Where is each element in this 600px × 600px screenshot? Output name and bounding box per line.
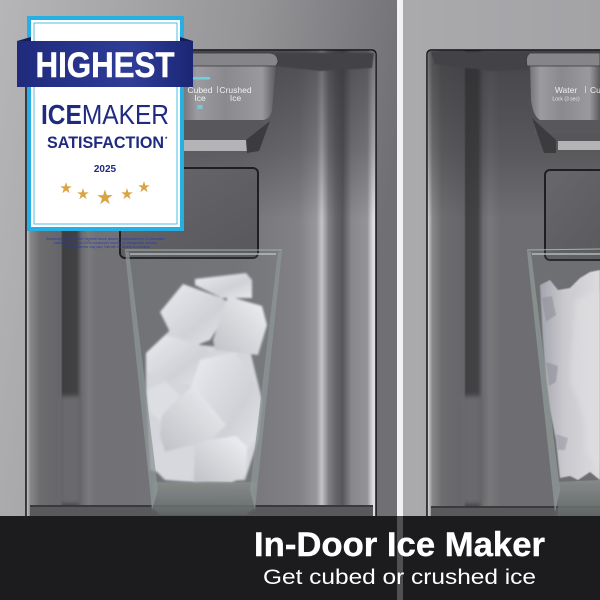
dispenser label: cubed ice: Cubed [187, 85, 213, 95]
dispenser head: Ice [194, 93, 206, 103]
footnote under badge: Samsung received the highest score among manufacturers in icemaker [46, 237, 166, 241]
white divider between doors [397, 0, 403, 600]
divider seen through band [397, 516, 403, 600]
glass of crushed ice [527, 249, 600, 516]
five gold stars: ★ [96, 187, 114, 209]
footnote under badge: satisfaction in the 2025 consumer survey of refrigerator owners. [54, 241, 158, 245]
panel: right dispenser recess [427, 50, 600, 520]
dispenser head [183, 53, 278, 155]
ice cubes [146, 273, 267, 483]
right door steel background [403, 0, 600, 600]
dispenser label: water: Water [555, 85, 577, 95]
glass base [153, 482, 256, 515]
footnote under badge: Your experiences may vary. Visit site for details and awards. [63, 245, 150, 249]
five gold stars [59, 179, 151, 209]
five gold stars: ★ [76, 186, 90, 203]
dispenser head: Ice [230, 93, 241, 103]
ribbon: highest: HIGHEST [36, 46, 174, 85]
five gold stars: ★ [59, 180, 73, 197]
bottom caption band [0, 516, 600, 600]
dark control panel [120, 168, 258, 258]
heading: icemaker: ICEMAKER [41, 99, 169, 130]
panel: left dispenser recess [26, 50, 376, 520]
footnote under badge [46, 237, 166, 249]
glass of cubed ice [125, 250, 282, 515]
top shadow of recess [276, 53, 374, 71]
glass walls [125, 251, 158, 510]
badge: icemaker satisfaction award: * [165, 137, 168, 143]
five gold stars: ★ [137, 179, 151, 196]
dispenser label: crushed ice: Crushed [219, 85, 252, 95]
title: In-Door Ice Maker [254, 526, 545, 564]
recess floor [30, 505, 373, 516]
year: 2025 [94, 164, 117, 175]
subtitle: Get cubed or crushed ice [263, 566, 536, 589]
ribbon: highest [17, 37, 193, 87]
crushed ice [540, 270, 600, 480]
heading: satisfaction: SATISFACTION [47, 133, 164, 152]
dispenser head: Lock (3 sec) [552, 96, 580, 102]
five gold stars: ★ [120, 186, 134, 203]
left door steel background [0, 0, 397, 600]
dispenser head [526, 53, 600, 153]
badge: icemaker satisfaction award [17, 16, 193, 231]
